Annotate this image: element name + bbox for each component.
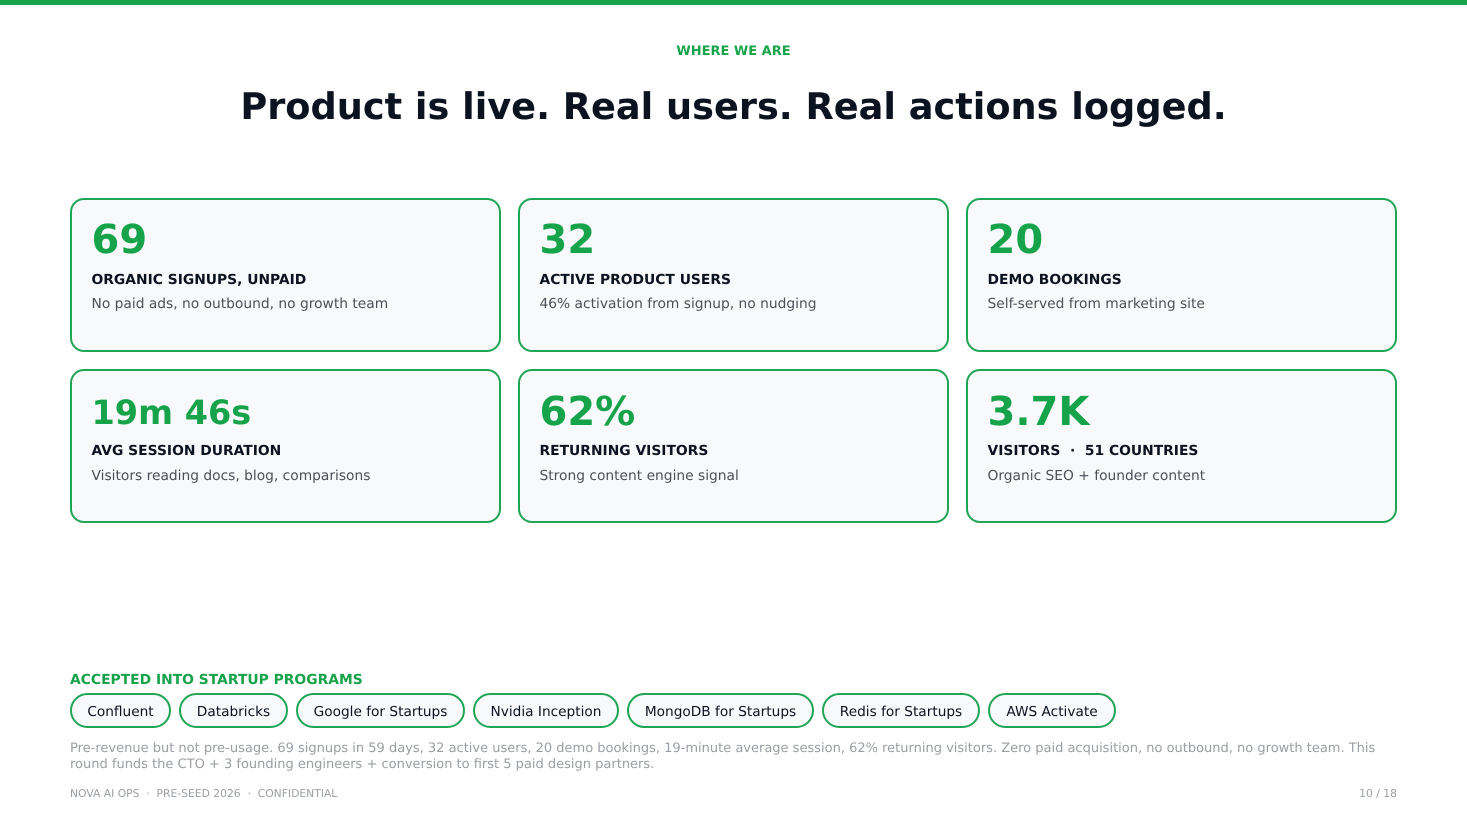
pill: Confluent: Confluent xyxy=(87,704,154,720)
stat description: Strong content engine signal xyxy=(540,468,739,484)
panel: session duration xyxy=(70,369,500,523)
pill: AWS Activate: AWS Activate xyxy=(1006,704,1098,720)
stat description: Visitors reading docs, blog, comparisons xyxy=(92,468,370,484)
pill: Nvidia Inception xyxy=(473,693,619,728)
pill: Confluent xyxy=(70,693,171,728)
pill: MongoDB for Startups: MongoDB for Startups xyxy=(645,704,796,720)
stat value: 69 xyxy=(92,217,147,263)
pill: Redis for Startups xyxy=(822,693,980,728)
panel: organic signups xyxy=(70,198,500,352)
eyebrow heading: WHERE WE ARE xyxy=(676,44,791,59)
stat value: 32 xyxy=(540,217,595,263)
top accent bar xyxy=(0,0,1467,4)
stat description: No paid ads, no outbound, no growth team xyxy=(92,296,388,312)
panel: active users xyxy=(518,198,948,352)
stat value: 20 xyxy=(988,217,1043,263)
program pills xyxy=(70,693,1116,728)
stat value: 3.7K xyxy=(988,389,1089,435)
pill: AWS Activate xyxy=(988,693,1116,728)
pill: Databricks xyxy=(179,693,288,728)
footer page number: 10 / 18 xyxy=(1359,787,1397,800)
stat value: 62% xyxy=(540,389,635,435)
stat value: 19m 46s xyxy=(92,393,251,432)
panel: demo bookings xyxy=(966,198,1396,352)
title: Product is live. Real users. Real actions logged. xyxy=(240,85,1227,128)
stat label: AVG SESSION DURATION xyxy=(92,443,281,459)
stat label: DEMO BOOKINGS xyxy=(988,272,1122,288)
stat label: ORGANIC SIGNUPS, UNPAID xyxy=(92,272,306,288)
stat label: ACTIVE PRODUCT USERS xyxy=(540,272,731,288)
pill: MongoDB for Startups xyxy=(627,693,814,728)
programs heading: ACCEPTED INTO STARTUP PROGRAMS xyxy=(70,672,363,688)
footer left: NOVA AI OPS · PRE-SEED 2026 · CONFIDENTIAL xyxy=(70,787,337,800)
summary paragraph: Pre-revenue but not pre-usage. 69 signups in 59 days, 32 active users, 20 demo bookings, 19-minute average session, 62% returning visitors. Zero paid acquisition, no outbound, no growth team. This round funds the CTO + 3 founding engineers + conversion to first 5 paid design partners. xyxy=(70,741,1375,772)
stat description: 46% activation from signup, no nudging xyxy=(540,296,816,312)
stat description: Organic SEO + founder content xyxy=(988,468,1205,484)
panel: visitors and countries xyxy=(966,369,1396,523)
pill: Nvidia Inception: Nvidia Inception xyxy=(491,704,601,720)
pill: Databricks: Databricks xyxy=(197,704,270,720)
pill: Redis for Startups: Redis for Startups xyxy=(840,704,962,720)
stat label: VISITORS · 51 COUNTRIES xyxy=(988,443,1198,459)
pill: Google for Startups xyxy=(296,693,465,728)
pill: Google for Startups: Google for Startups xyxy=(314,704,447,720)
stat description: Self-served from marketing site xyxy=(988,296,1205,312)
stat label: RETURNING VISITORS xyxy=(540,443,708,459)
panel: returning visitors xyxy=(518,369,948,523)
